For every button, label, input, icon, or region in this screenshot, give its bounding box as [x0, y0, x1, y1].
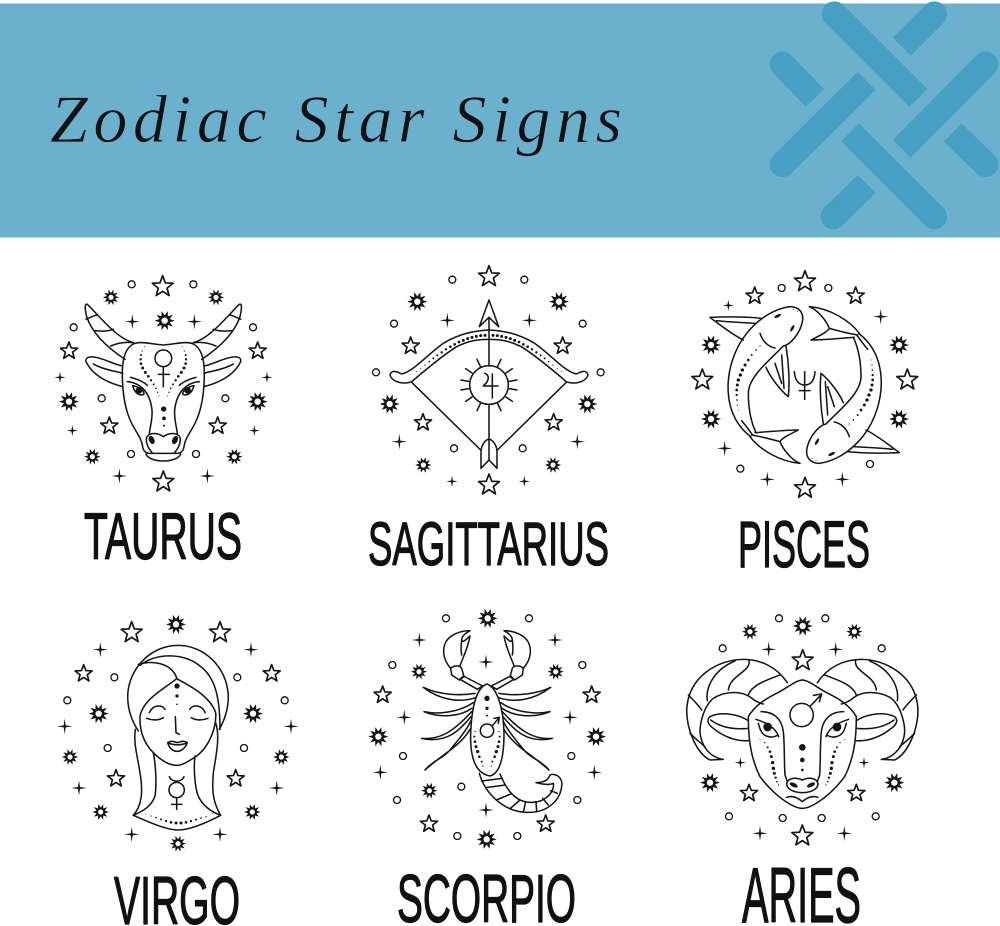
- panel: virgo: [57, 615, 299, 926]
- icon: scorpion with stars: [368, 609, 606, 849]
- panel: taurus: [54, 276, 273, 573]
- panel: aries: [687, 615, 918, 926]
- icon: bow and arrow with stars: [372, 266, 604, 494]
- label: Sagittarius: SAGITTARIUS: [368, 510, 609, 578]
- panel: pisces: [692, 271, 918, 581]
- banner background: [0, 4, 1000, 238]
- panel: scorpio: [368, 609, 606, 926]
- woman figure: [128, 645, 228, 830]
- ram head: [687, 659, 918, 808]
- star field: [372, 266, 604, 494]
- star field: [368, 609, 606, 849]
- label: Pisces: PISCES: [738, 507, 870, 581]
- star field: [700, 615, 904, 845]
- star field: [57, 615, 299, 851]
- icon: ram with stars: [687, 615, 918, 845]
- icon: two fish with stars: [692, 271, 918, 497]
- bull head: [85, 304, 241, 461]
- icon: bull with stars: [54, 276, 273, 491]
- fish pair and neptune symbol: [710, 307, 899, 463]
- icon: woman with stars: [57, 615, 299, 851]
- scorpion: [422, 631, 562, 812]
- title: Zodiac Star Signs: [50, 81, 622, 157]
- panel: sagittarius: [368, 266, 609, 578]
- star field: [692, 271, 918, 497]
- bow, arrow and sun: [390, 300, 588, 468]
- logo: woven cross mark: [770, 1, 998, 229]
- label: Taurus: TAURUS: [84, 499, 242, 573]
- star field: [54, 276, 273, 491]
